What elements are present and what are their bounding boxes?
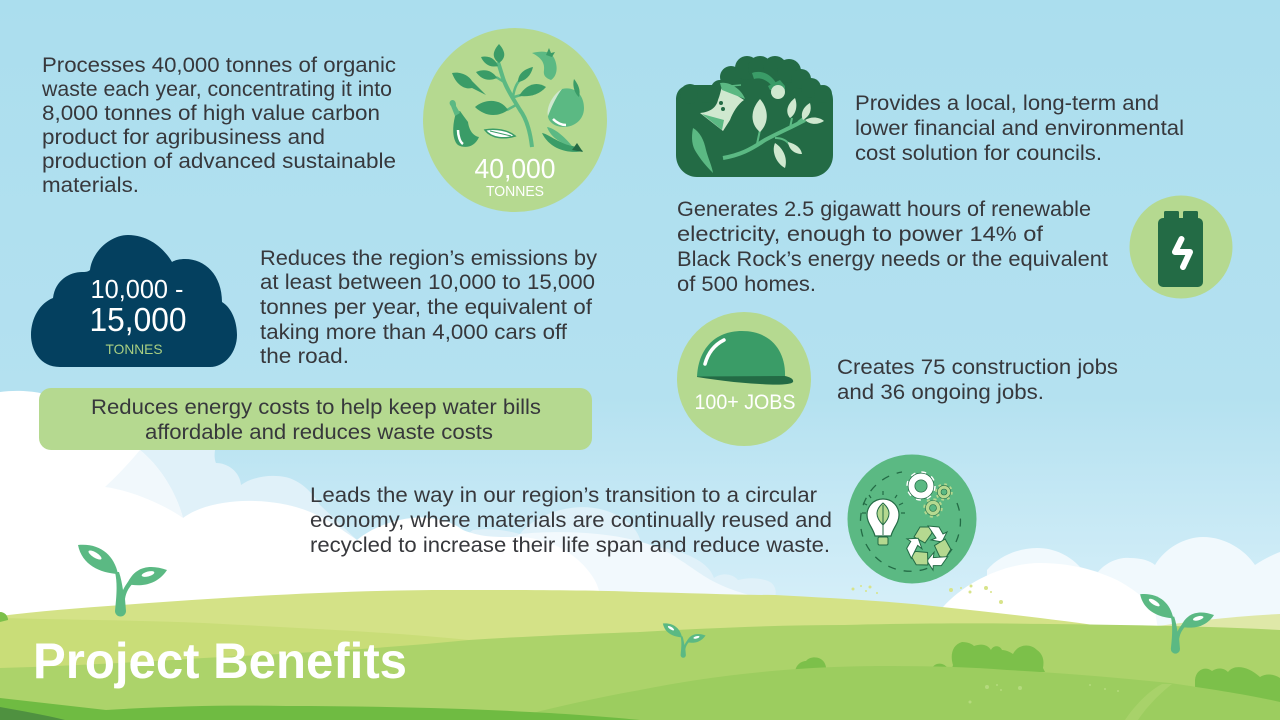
badge: circular economy icon (848, 454, 976, 584)
badge: 40,000 tonnes organic waste (423, 28, 607, 212)
icon: seedling right (1140, 594, 1214, 654)
text: organic waste: 8,000 tonnes of high value carbon (42, 102, 380, 125)
icon: hard hat (697, 331, 793, 385)
text: renewable electricity: electricity, enough to power 14% of (677, 223, 1043, 246)
background: rolling hills (0, 584, 1280, 720)
text: jobs: Creates 75 construction jobs (837, 356, 1118, 379)
text: organic waste: materials. (42, 174, 139, 197)
text: local solution (855, 92, 1184, 165)
icon: branch and food scraps (450, 44, 584, 152)
text: emissions (260, 247, 598, 368)
text: organic waste (41, 54, 396, 197)
icon: seedling centre (663, 623, 706, 658)
text: jobs (837, 356, 1118, 404)
speckles (852, 584, 1003, 604)
icon: lettuce leaf (692, 128, 713, 173)
badge: 40,000 tonnes organic waste: 40,000 (474, 153, 556, 184)
text: circular economy (310, 484, 832, 557)
text: organic waste: waste each year, concentrating it into (41, 78, 392, 101)
icon: leafy branch (723, 98, 824, 168)
icon: battery (1130, 196, 1232, 298)
text: local solution: lower financial and environmental (855, 117, 1184, 140)
text: circular economy: Leads the way in our region’s transition to a circular (310, 484, 817, 507)
text: jobs: and 36 ongoing jobs. (837, 381, 1044, 404)
badge: 10,000 - 15,000 tonnes cloud: TONNES (106, 341, 162, 357)
icon: apple core (700, 83, 745, 131)
text: local solution: Provides a local, long-term and (855, 92, 1159, 115)
title: Project Benefits (33, 633, 407, 689)
callout: energy costs: affordable and reduces waste costs (145, 421, 493, 444)
badge: 100+ jobs (677, 312, 811, 446)
badge: 10,000 - 15,000 tonnes cloud: 10,000 - (90, 274, 184, 304)
text: emissions: tonnes per year, the equivalent of (260, 296, 592, 319)
text: organic waste: Processes 40,000 tonnes of organic (42, 54, 396, 77)
text: local solution: cost solution for councils. (855, 142, 1102, 165)
badge: 100+ jobs: 100+ JOBS (694, 391, 796, 414)
badge: 40,000 tonnes organic waste: TONNES (486, 183, 544, 200)
text: organic waste: production of advanced sustainable (42, 150, 396, 173)
bushes (0, 612, 1280, 710)
text: renewable electricity: Generates 2.5 gigawatt hours of renewable (677, 198, 1091, 221)
text: emissions: taking more than 4,000 cars off (260, 321, 567, 344)
text: emissions: the road. (260, 345, 349, 368)
callout: energy costs: Reduces energy costs to help keep water bills (91, 396, 541, 419)
badge: 10,000 - 15,000 tonnes cloud (31, 235, 237, 367)
text: emissions: at least between 10,000 to 15,000 (260, 271, 595, 294)
background: clouds (0, 391, 1280, 650)
text: circular economy: economy, where materials are continually reused and (310, 509, 832, 532)
badge: compost council cost icon (676, 56, 833, 177)
icon: light bulb with leaf (862, 491, 905, 545)
text: circular economy: recycled to increase their life span and reduce waste. (310, 534, 830, 557)
icon: acorn scrap (752, 72, 785, 99)
icon: recycling arrows (902, 526, 955, 573)
icon: gears (908, 473, 952, 516)
text: renewable electricity: Black Rock’s energy needs or the equivalent (677, 248, 1108, 271)
text: emissions: Reduces the region’s emissions by (260, 247, 598, 270)
text: renewable electricity: of 500 homes. (677, 273, 816, 296)
badge: 10,000 - 15,000 tonnes cloud: 15,000 (90, 301, 186, 338)
icon: seedling left (78, 545, 167, 616)
text: renewable electricity (677, 198, 1108, 296)
text: organic waste: product for agribusiness and (42, 126, 325, 149)
callout: energy costs (39, 388, 592, 450)
